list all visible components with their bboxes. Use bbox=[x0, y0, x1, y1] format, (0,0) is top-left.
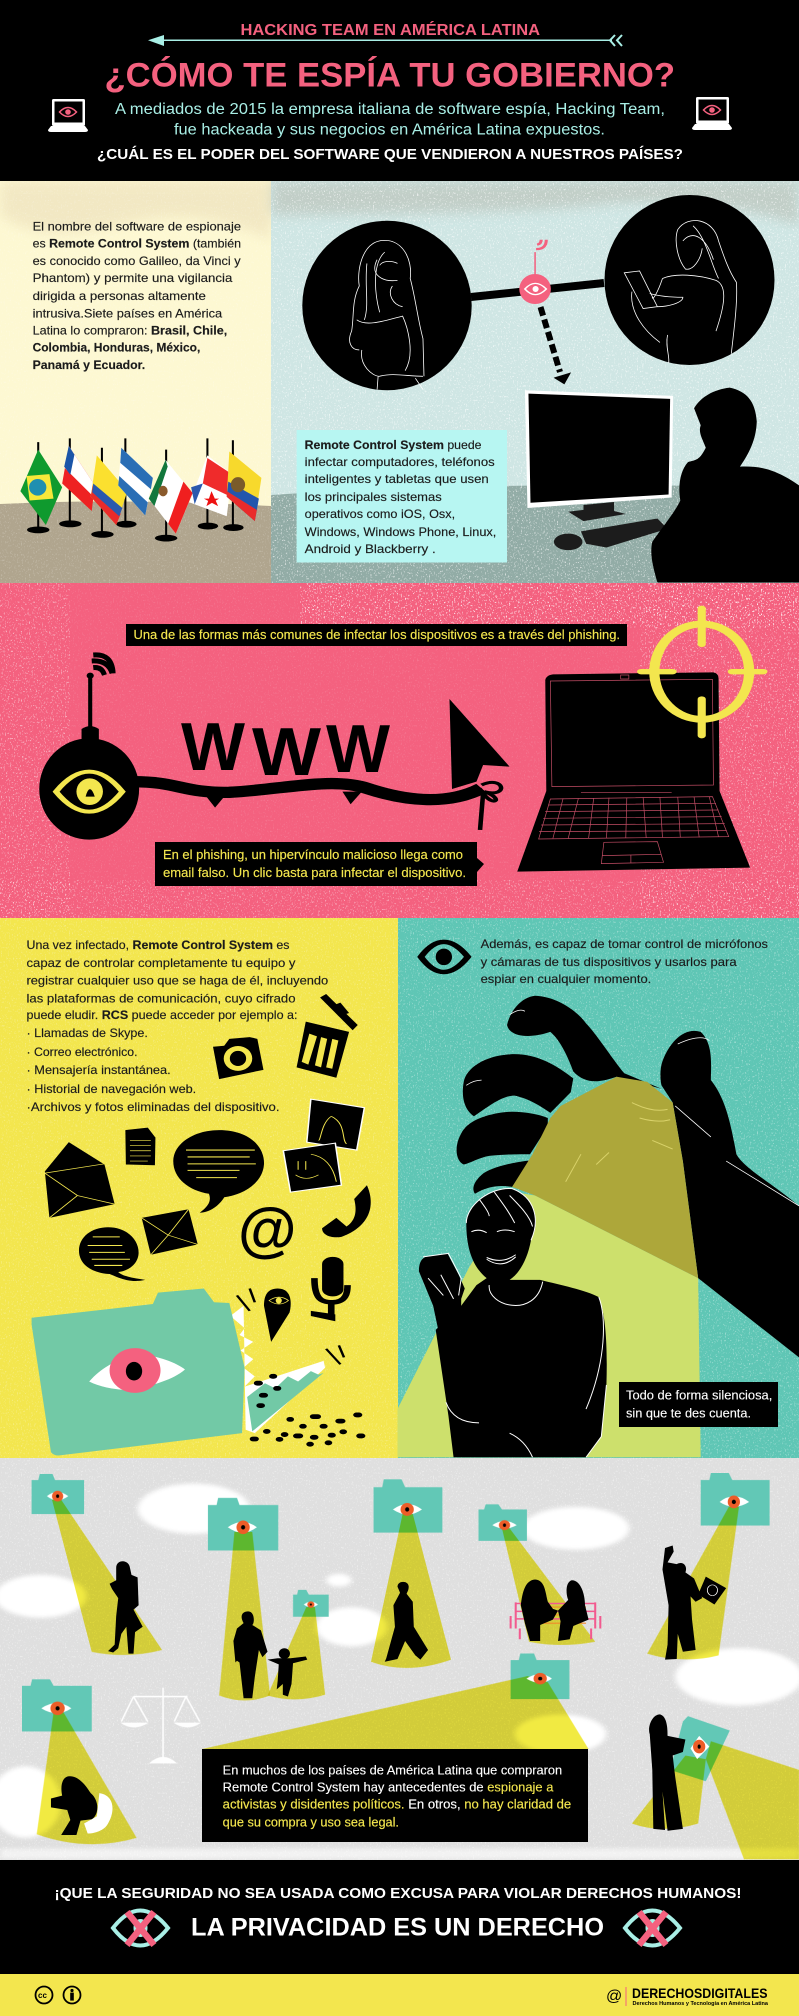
camera 5 bbox=[479, 1504, 595, 1645]
illustration: hand and person bbox=[397, 996, 799, 1457]
silhouette: adult and child bbox=[233, 1611, 307, 1698]
icon: creative commons: cc bbox=[38, 1991, 47, 2000]
camera 2 bbox=[208, 1498, 278, 1700]
icon: document bbox=[125, 1128, 155, 1165]
icon: envelope bbox=[45, 1142, 115, 1218]
footer: call to action bbox=[0, 1860, 799, 1974]
icon: www bbox=[181, 709, 391, 790]
icons: data types bbox=[32, 994, 371, 1456]
footer: credits bbox=[0, 1974, 799, 2016]
callout: antecedentes bbox=[202, 1749, 588, 1842]
icon: crossed eye left bbox=[113, 1910, 168, 1946]
silhouette: woman with phone bbox=[108, 1561, 143, 1654]
icon: flags bbox=[20, 438, 261, 541]
icon: at sign: @ bbox=[238, 1196, 297, 1263]
header bbox=[0, 0, 799, 181]
callout: phishing bottom: En el phishing, un hipervínculo malicioso llega como bbox=[163, 848, 463, 862]
text: data access: Una vez infectado, Remote Control System es bbox=[26, 938, 289, 952]
icon: bench couple bbox=[511, 1580, 600, 1641]
text: microphone and camera: y cámaras de tus dispositivos y usarlos para bbox=[481, 955, 737, 969]
callout: antecedentes: que su compra y uso sea legal. bbox=[223, 1816, 399, 1830]
text: software intro: El nombre del software de espionaje bbox=[33, 220, 241, 234]
icon: creative commons bbox=[36, 1986, 52, 2004]
text: software intro bbox=[33, 220, 241, 372]
icon: microphone bbox=[311, 1257, 348, 1321]
icon: scales of justice bbox=[120, 1688, 201, 1763]
callout: remote control system: inteligentes y tabletas que usen bbox=[305, 472, 489, 486]
camera 7 bbox=[22, 1679, 137, 1844]
text: software intro: intrusiva.Siete países en América bbox=[33, 307, 223, 321]
icon: folder monster bbox=[32, 1289, 362, 1456]
circle: left woman bbox=[302, 221, 472, 390]
text: software intro: dirigida a personas altamente bbox=[33, 289, 206, 303]
text: data access: · Correo electrónico. bbox=[26, 1045, 138, 1059]
intro text bbox=[115, 101, 665, 139]
person bbox=[419, 1189, 607, 1457]
icon: crossed eye right bbox=[625, 1910, 680, 1946]
line drawing: woman on phone bbox=[350, 240, 424, 389]
icon: envelope small bbox=[142, 1209, 198, 1255]
callout: phishing top bbox=[126, 624, 627, 646]
panel: microphone and camera bbox=[397, 918, 799, 1458]
text: software intro: es Remote Control System (también bbox=[33, 237, 241, 251]
silhouette: person on toilet bbox=[51, 1776, 113, 1835]
icon: eye bbox=[421, 942, 468, 972]
icon: speech bubble small bbox=[79, 1227, 145, 1281]
text: software intro: Latina lo compraron: Brasil, Chile, bbox=[33, 324, 227, 338]
text: data access: ·Archivos y fotos eliminadas del dispositivo. bbox=[26, 1100, 280, 1114]
icon: telephone bbox=[322, 1185, 371, 1237]
logo: DERECHOSDIGITALES bbox=[632, 1985, 768, 2001]
callout: phishing top: Una de las formas más comunes de infectar los dispositivos es a través del phishing. bbox=[134, 628, 620, 642]
icon: www: W bbox=[181, 709, 246, 785]
icon: bomb with eye bbox=[39, 655, 139, 840]
node: spy device bbox=[519, 240, 551, 304]
text: data access: registrar cualquier uso que se haga de él, incluyendo bbox=[26, 973, 329, 987]
logo bbox=[606, 1985, 769, 2007]
text: microphone and camera: espiar en cualquier momento. bbox=[481, 972, 651, 986]
camera 6 bbox=[647, 1473, 769, 1659]
callout: antecedentes: En muchos de los países de América Latina que compraron bbox=[223, 1764, 562, 1778]
camera 1 bbox=[32, 1474, 162, 1655]
callout: remote control system bbox=[297, 430, 507, 562]
arrow: dashed to monitor bbox=[540, 307, 569, 383]
icon: laptop right bbox=[692, 97, 732, 130]
callout: remote control system: los principales sistemas bbox=[305, 490, 442, 504]
question: ¿CUÁL ES EL PODER DEL SOFTWARE QUE VENDIERON A NUESTROS PAÍSES? bbox=[97, 146, 683, 163]
icon: speech bubble large bbox=[173, 1130, 264, 1213]
logo: @ bbox=[606, 1988, 622, 2005]
icon: attribution bbox=[64, 1986, 80, 2004]
text: software intro: Panamá y Ecuador. bbox=[33, 358, 145, 372]
beam of light bbox=[397, 1192, 701, 1457]
callout: antecedentes: activistas y disidentes políticos. En otros, no hay claridad de bbox=[223, 1798, 571, 1812]
intro text: fue hackeada y sus negocios en América Latina expuestos. bbox=[174, 122, 605, 139]
callout: silently: Todo de forma silenciosa, bbox=[626, 1388, 772, 1402]
text: data access: · Mensajería instantánea. bbox=[26, 1063, 171, 1077]
panel: how it works bbox=[271, 181, 799, 583]
text: software intro: Phantom) y permite una vigilancia bbox=[33, 271, 233, 285]
silhouette: walking man bbox=[385, 1582, 428, 1662]
callout: silently bbox=[619, 1382, 778, 1427]
panel: phishing bbox=[0, 583, 799, 918]
text: microphone and camera bbox=[481, 937, 768, 986]
icon: camera bbox=[213, 1037, 263, 1079]
camera 3 bbox=[268, 1590, 329, 1699]
callout: remote control system: infectar computadores, teléfonos bbox=[305, 455, 495, 469]
text: data access: capaz de controlar completamente tu equipo y bbox=[26, 956, 296, 970]
text: software intro: Colombia, Honduras, México, bbox=[33, 340, 200, 354]
icon: www: W bbox=[252, 714, 322, 790]
icon: laptop left bbox=[48, 99, 88, 132]
text: data access: · Historial de navegación web. bbox=[26, 1082, 196, 1096]
callout: phishing bottom: email falso. Un clic basta para infectar el dispositivo. bbox=[163, 866, 466, 880]
text: microphone and camera: Además, es capaz de tomar control de micrófonos bbox=[481, 937, 768, 951]
silhouette: protester bbox=[662, 1546, 726, 1660]
icon: cursor bbox=[449, 699, 510, 789]
icon: crosshair bbox=[641, 608, 763, 736]
slogan small: ¡QUE LA SEGURIDAD NO SEA USADA COMO EXCUSA PARA VIOLAR DERECHOS HUMANOS! bbox=[54, 1885, 742, 1902]
icon: map pin eye bbox=[237, 1289, 344, 1364]
camera 9 bbox=[632, 1716, 799, 1859]
circle: right woman bbox=[604, 195, 774, 365]
clouds bbox=[0, 1484, 799, 1859]
panel: software intro bbox=[0, 181, 271, 583]
fuse bbox=[134, 782, 501, 830]
text: data access: puede eludir. RCS puede acceder por ejemplo a: bbox=[26, 1008, 298, 1022]
arrow bbox=[148, 35, 622, 46]
text: data access: · Llamadas de Skype. bbox=[26, 1026, 148, 1040]
panel: data access bbox=[0, 918, 398, 1458]
hand bbox=[457, 996, 799, 1357]
callout: remote control system: Windows, Windows Phone, Linux, bbox=[305, 525, 496, 539]
intro text: A mediados de 2015 la empresa italiana de software espía, Hacking Team, bbox=[115, 101, 665, 118]
line drawing: woman with smartphone bbox=[624, 221, 737, 363]
text: data access: las plataformas de comunicación, cuyo cifrado bbox=[26, 991, 296, 1005]
panel: surveillance bbox=[0, 1458, 799, 1860]
surveillance cameras and beams bbox=[22, 1473, 799, 1859]
text: data access bbox=[26, 938, 329, 1114]
connection line bbox=[471, 283, 604, 297]
icon: monitor and spy bbox=[525, 388, 799, 583]
title: ¿CÓMO TE ESPÍA TU GOBIERNO? bbox=[104, 56, 675, 94]
icon: laptop bbox=[517, 672, 750, 872]
camera 8 bbox=[202, 1654, 589, 1749]
callout: phishing bottom bbox=[155, 842, 484, 886]
camera 4 bbox=[371, 1479, 451, 1668]
callout: silently: sin que te des cuenta. bbox=[626, 1407, 751, 1421]
icon: www: W bbox=[326, 711, 391, 787]
silhouette: woman with camera bbox=[649, 1714, 685, 1831]
callout: remote control system: operativos como iOS, Osx, bbox=[305, 507, 455, 521]
text: software intro: es conocido como Galileo, da Vinci y bbox=[33, 254, 241, 268]
kicker: HACKING TEAM EN AMÉRICA LATINA bbox=[240, 20, 540, 39]
callout: remote control system: Android y Blackberry . bbox=[305, 542, 436, 556]
logo: Derechos Humanos y Tecnología en América Latina bbox=[632, 2001, 769, 2007]
icon: photos bbox=[283, 1099, 364, 1192]
icon: trash bbox=[297, 994, 358, 1078]
silhouette: spy bbox=[651, 388, 799, 583]
callout: antecedentes: Remote Control System hay antecedentes de espionaje a bbox=[223, 1781, 553, 1795]
slogan large: LA PRIVACIDAD ES UN DERECHO bbox=[191, 1914, 604, 1942]
callout: remote control system: Remote Control System puede bbox=[305, 438, 482, 452]
